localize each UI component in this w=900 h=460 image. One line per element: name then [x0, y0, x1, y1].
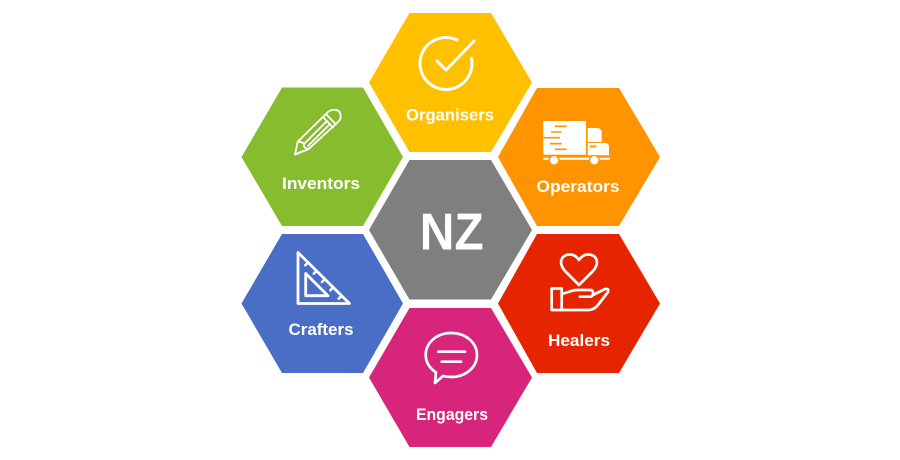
panel: Healers: [498, 234, 660, 373]
label: Organisers: Organisers: [406, 106, 494, 124]
label: Healers: Healers: [548, 332, 610, 350]
icon: delivery truck: [543, 121, 609, 165]
label: Engagers: Engagers: [416, 406, 488, 424]
panel: Engagers: [369, 308, 532, 447]
label: Crafters: Crafters: [288, 321, 354, 339]
panel: Crafters: [242, 234, 403, 373]
icon: check circle: [420, 37, 474, 89]
label: Operators: Operators: [536, 178, 620, 196]
panel: NZ center: [369, 160, 532, 300]
panel: Organisers: [369, 13, 532, 152]
label: NZ: NZ: [420, 204, 484, 262]
icon: hand with heart: [552, 254, 608, 310]
panel: Operators: [498, 88, 660, 226]
icon: set square: [298, 252, 350, 304]
panel: Inventors: [242, 88, 403, 226]
icon: speech bubble: [426, 333, 477, 383]
icon: pencil: [295, 110, 341, 154]
label: Inventors: Inventors: [282, 175, 360, 193]
